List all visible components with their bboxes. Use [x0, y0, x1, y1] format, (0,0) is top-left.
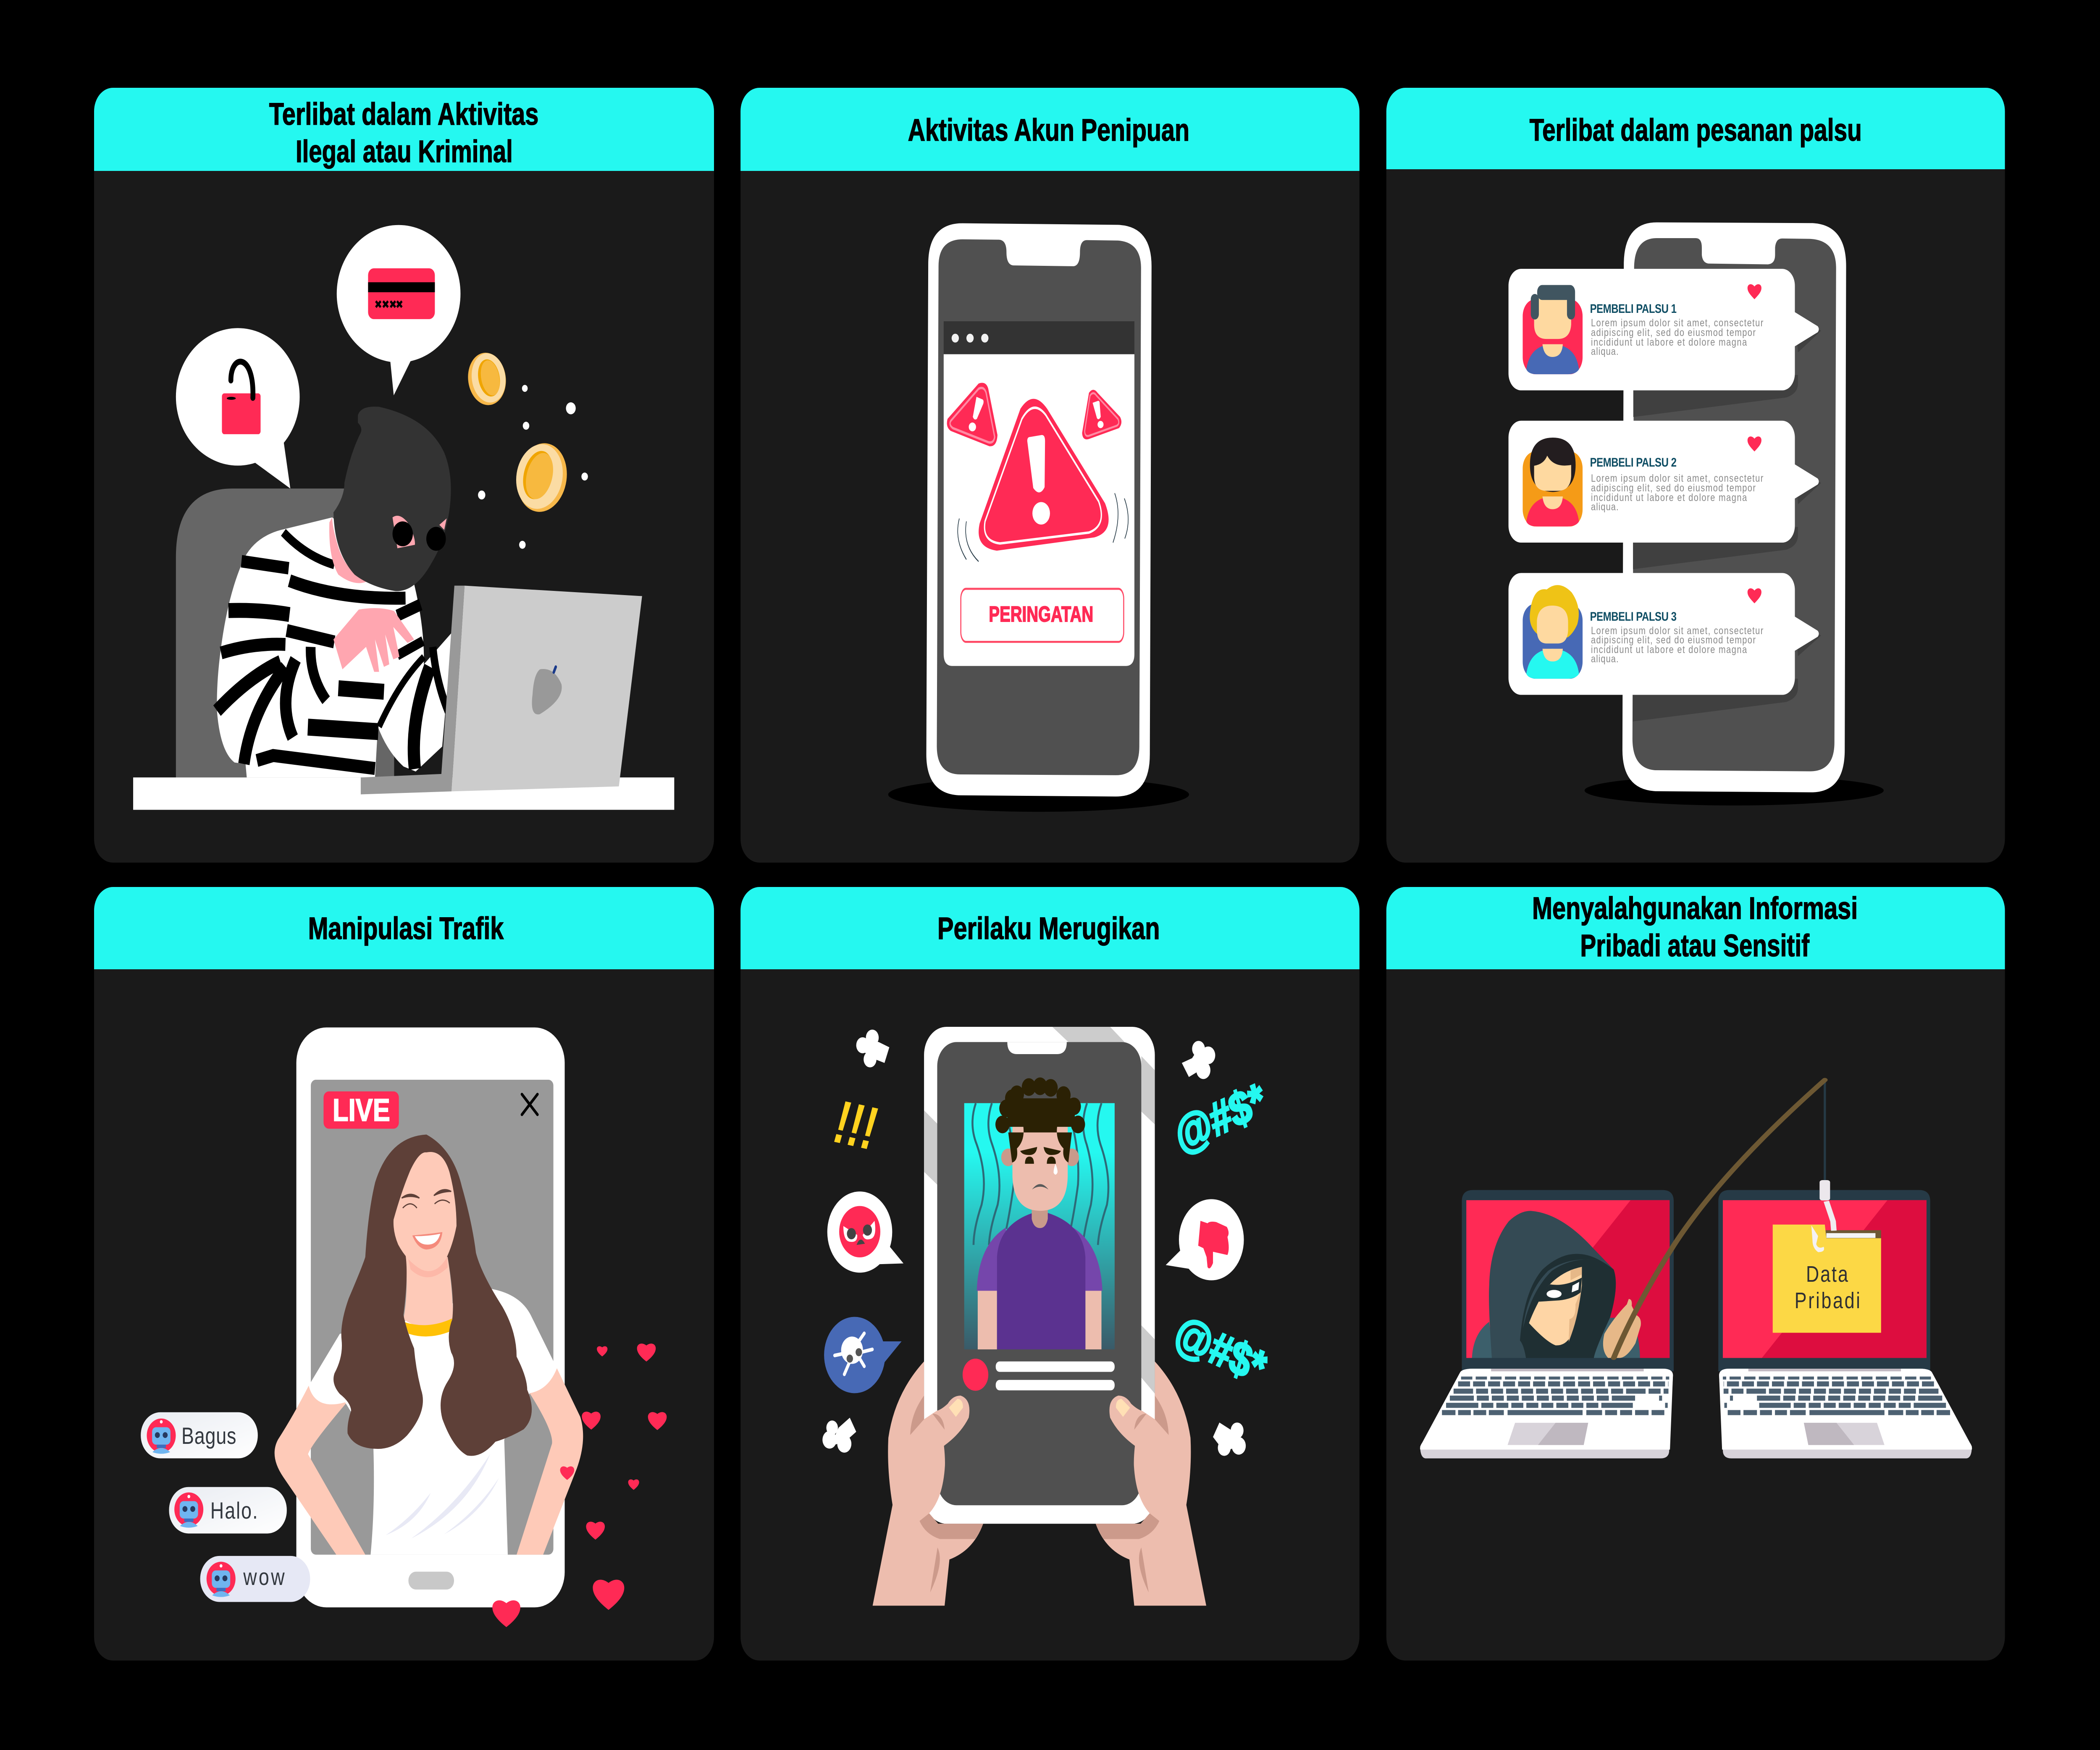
panel: illegal or criminal activity	[94, 88, 714, 863]
close icon	[522, 1094, 538, 1115]
icon: robot avatar	[147, 1419, 176, 1454]
speech bubble: credit card	[337, 225, 460, 395]
heading: illegal activity: Terlibat dalam Aktivitas	[269, 97, 538, 132]
header bar: harmful behaviour	[740, 887, 1360, 969]
phone screen	[937, 1042, 1141, 1505]
avatar: buyer 2	[1522, 438, 1583, 527]
review card 2	[1509, 421, 1819, 543]
thief neck	[329, 517, 368, 583]
review text 1	[1590, 301, 1764, 357]
review text 2: aliqua.	[1591, 501, 1619, 513]
speech bubble: open padlock	[176, 328, 300, 488]
illustration: phone with warning	[888, 223, 1189, 812]
label: live: LIVE	[333, 1093, 390, 1128]
review text 1: adipiscing elit, sed do eiusmod tempor	[1591, 327, 1756, 338]
heading: illegal activity	[269, 97, 538, 169]
heading: personal info: Menyalahgunakan Informasi	[1532, 891, 1858, 926]
review text 3: Lorem ipsum dolor sit amet, consectetur	[1591, 625, 1764, 637]
icon: small warning triangle left	[947, 383, 998, 446]
wavy background lines	[972, 1103, 1108, 1245]
symbols: censored swear top: @#$*	[1169, 1073, 1271, 1162]
symbols: censored swear bottom: @#$*	[1170, 1305, 1272, 1394]
icon: large warning triangle	[979, 399, 1109, 551]
review text 3: PEMBELI PALSU 3	[1590, 609, 1677, 624]
review text 3: incididunt ut labore et dolore magna	[1591, 644, 1747, 656]
chat bubble: halo	[169, 1487, 287, 1533]
home button	[408, 1572, 454, 1590]
phone screen	[1633, 238, 1836, 771]
header bar: fake orders	[1386, 88, 2005, 169]
thief masked head	[333, 407, 451, 591]
review text 1: aliqua.	[1591, 346, 1619, 357]
review text 1: Lorem ipsum dolor sit amet, consectetur	[1591, 317, 1764, 329]
header bar: illegal activity	[94, 88, 714, 171]
icon: robot avatar	[174, 1493, 203, 1528]
phone body	[297, 1027, 565, 1607]
icon: small warning triangle right	[1082, 390, 1121, 439]
chat bubble: wow	[200, 1556, 310, 1602]
header bar: fraudulent account	[740, 88, 1360, 171]
illustration: bullied user on phone	[822, 1027, 1246, 1606]
video info rows	[963, 1359, 1115, 1391]
hooded hacker	[1472, 1211, 1641, 1358]
header bar: personal info	[1386, 887, 2005, 969]
data folder	[1773, 1225, 1881, 1333]
label: peringatan: PERINGATAN	[989, 602, 1093, 626]
sparkle dots	[478, 385, 588, 549]
live badge	[323, 1091, 399, 1129]
label: data pribadi: Data	[1806, 1262, 1848, 1287]
panel: misuse of personal information	[1386, 887, 2005, 1661]
table	[133, 777, 674, 810]
floating hearts	[492, 1343, 667, 1627]
panel: traffic manipulation	[94, 887, 714, 1661]
heading: fake orders: Terlibat dalam pesanan palsu	[1530, 113, 1862, 148]
chat bubble: bagus	[141, 1412, 258, 1459]
heading: personal info	[1532, 891, 1858, 963]
laptop left	[1420, 1190, 1674, 1459]
icon: robot avatar	[207, 1562, 236, 1597]
puff clouds	[822, 1030, 1246, 1456]
phone screen	[937, 239, 1141, 775]
warning button	[961, 589, 1124, 642]
alert window	[944, 321, 1134, 666]
review text 2: adipiscing elit, sed do eiusmod tempor	[1591, 482, 1756, 494]
review text 2: PEMBELI PALSU 2	[1590, 455, 1677, 470]
review text 3: adipiscing elit, sed do eiusmod tempor	[1591, 634, 1756, 646]
chat label: halo: Halo.	[210, 1497, 258, 1524]
header bar: traffic manipulation	[94, 887, 714, 969]
review card 3	[1509, 573, 1819, 695]
coins	[463, 347, 575, 520]
screen left	[1466, 1200, 1670, 1358]
vibration lines	[958, 493, 1128, 561]
review text 2: Lorem ipsum dolor sit amet, consectetur	[1591, 472, 1764, 484]
streamer	[275, 1134, 583, 1555]
label: data pribadi: Pribadi	[1795, 1288, 1860, 1313]
chat label: wow: wow	[243, 1564, 285, 1590]
chair	[176, 488, 394, 777]
panel: harmful behaviour	[740, 887, 1360, 1661]
hand right	[1096, 1362, 1206, 1606]
heading: personal info: Pribadi atau Sensitif	[1580, 929, 1810, 963]
fish hook	[1811, 1180, 1834, 1252]
laptop right	[1718, 1190, 1972, 1459]
symbols: exclamation marks: !!!	[831, 1087, 881, 1163]
avatar: buyer 1	[1522, 285, 1583, 374]
laptop	[361, 586, 642, 795]
screen right	[1723, 1200, 1927, 1358]
label: data pribadi	[1795, 1262, 1860, 1313]
sad man	[977, 1077, 1102, 1349]
heading: harmful behaviour: Perilaku Merugikan	[937, 911, 1160, 946]
illustration: live stream	[141, 1027, 667, 1627]
heading: illegal activity: Ilegal atau Kriminal	[296, 134, 513, 169]
speech bubble: angry face	[827, 1191, 903, 1272]
review text 2: incididunt ut labore et dolore magna	[1591, 492, 1747, 504]
review text 2	[1590, 455, 1764, 513]
fishing rod	[1614, 1080, 1825, 1358]
thief body with striped shirt	[217, 517, 452, 777]
fishing line	[1824, 1080, 1826, 1181]
phone shadow	[888, 777, 1189, 812]
avatar: buyer 3	[1522, 585, 1583, 679]
phone screen	[311, 1080, 554, 1555]
panel: fake orders	[1386, 88, 2005, 863]
card shadows	[1633, 315, 1821, 722]
hand left	[873, 1362, 983, 1606]
review text 1: incididunt ut labore et dolore magna	[1591, 336, 1747, 348]
phone body	[927, 223, 1152, 797]
review card 1	[1509, 269, 1819, 390]
thief hand	[333, 608, 414, 672]
chat label: bagus: Bagus	[181, 1422, 236, 1449]
review text 3	[1590, 609, 1764, 665]
illustration: phishing with laptops	[1420, 1080, 1972, 1459]
phone body	[924, 1027, 1155, 1524]
phone shadow	[1585, 775, 1884, 805]
phone body	[1622, 222, 1846, 792]
heading: fraudulent account: Aktivitas Akun Penipuan	[908, 113, 1189, 148]
review text 1: PEMBELI PALSU 1	[1590, 301, 1677, 316]
illustration: thief at laptop	[133, 225, 674, 810]
panel: fraudulent account activity	[740, 88, 1360, 863]
review text 3: aliqua.	[1591, 653, 1619, 665]
speech bubble: skull	[824, 1317, 902, 1393]
speech bubble: thumbs down	[1166, 1199, 1244, 1280]
video thumbnail	[964, 1103, 1115, 1349]
heading: traffic manipulation: Manipulasi Trafik	[308, 911, 504, 946]
illustration: phone with fake reviews	[1509, 222, 1884, 805]
